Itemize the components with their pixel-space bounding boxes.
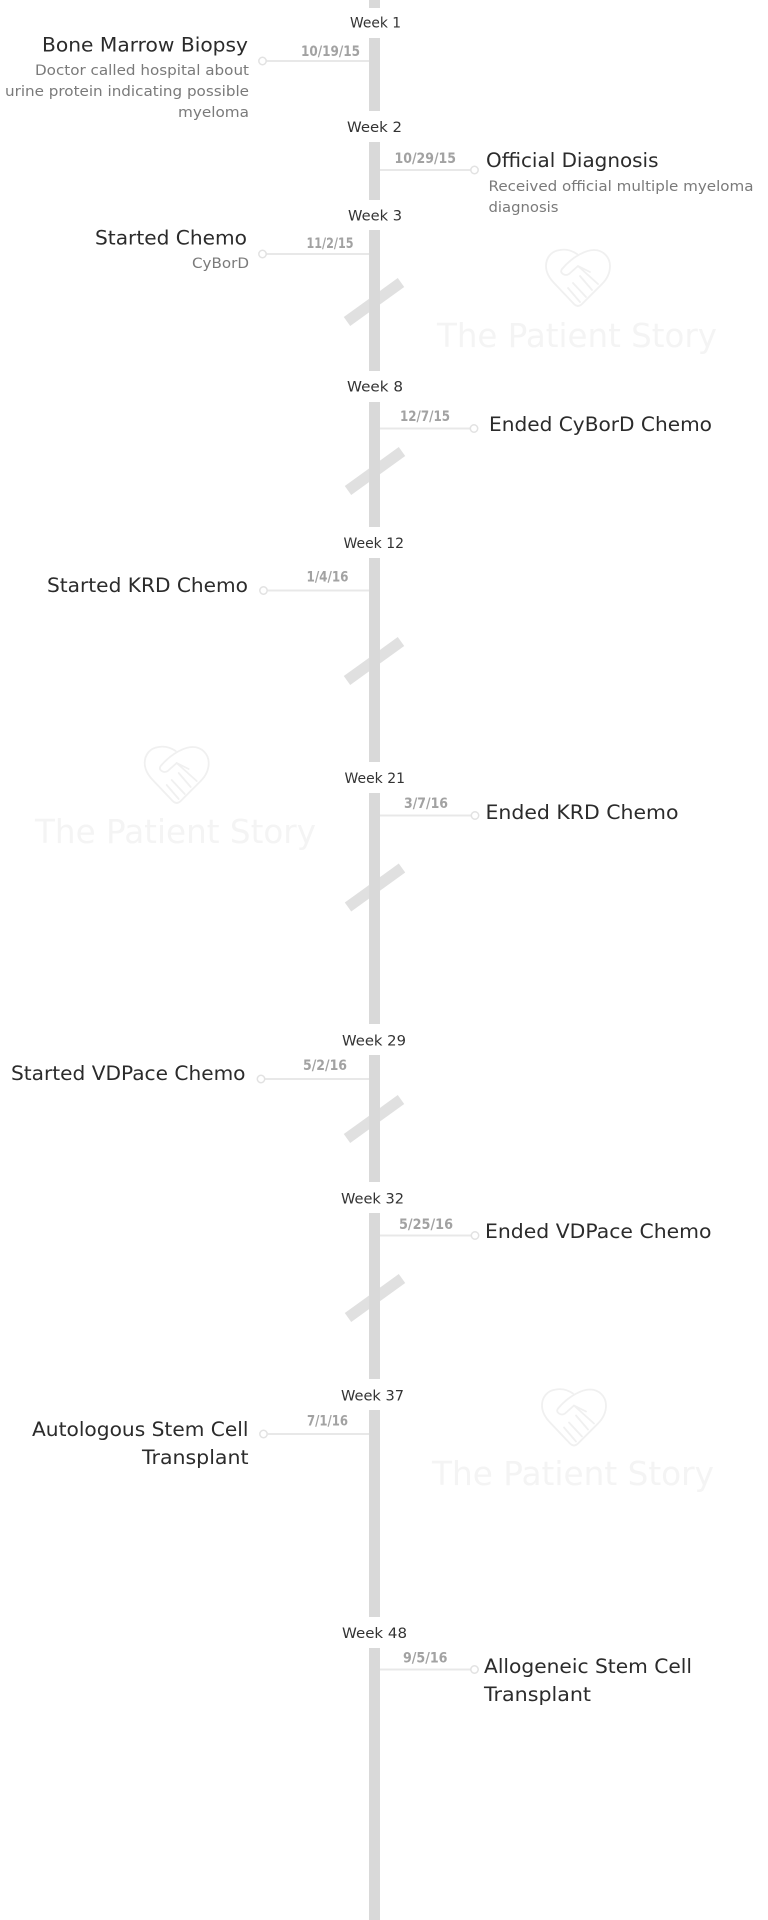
week labels: Week 3 [348, 208, 402, 224]
event: official diagnosis: 10/29/15 [394, 151, 456, 167]
event: official diagnosis [380, 149, 754, 216]
event: bone marrow biopsy: Doctor called hospital about [35, 63, 249, 79]
event: allogeneic stem cell transplant: Allogeneic Stem Cell [484, 1655, 692, 1678]
icon: heart handshake [145, 747, 209, 803]
week labels: Week 1 [350, 16, 401, 32]
timeline spine [369, 0, 380, 1920]
event: started krd chemo: Started KRD Chemo [47, 574, 248, 597]
event: ended vdpace chemo: 5/25/16 [399, 1217, 453, 1233]
week labels: Week 12 [344, 536, 404, 552]
event: started krd chemo [47, 570, 369, 597]
watermark: upper right [436, 250, 717, 355]
week labels: Week 29 [342, 1034, 406, 1050]
event: ended vdpace chemo: Ended VDPace Chemo [485, 1220, 712, 1243]
icon: heart handshake [542, 1389, 606, 1446]
event: allogeneic stem cell transplant [380, 1650, 692, 1706]
event: official diagnosis: Received official multiple myeloma [488, 179, 754, 195]
week labels: Week 32 [341, 1192, 404, 1208]
event: autologous stem cell transplant: Autologous Stem Cell [32, 1418, 248, 1441]
event: bone marrow biopsy [5, 34, 369, 121]
watermark text: The Patient Story [34, 812, 316, 851]
event: autologous stem cell transplant: 7/1/16 [307, 1414, 348, 1430]
event: allogeneic stem cell transplant: 9/5/16 [403, 1650, 448, 1666]
event: started vdpace chemo: Started VDPace Chemo [11, 1062, 246, 1085]
week labels: Week 8 [347, 380, 403, 396]
event: ended cybord chemo: Ended CyBorD Chemo [489, 413, 712, 436]
event: official diagnosis: diagnosis [488, 200, 558, 216]
timeline break slashes [347, 282, 402, 1318]
event: started vdpace chemo [11, 1058, 369, 1085]
event: ended krd chemo: 3/7/16 [404, 796, 448, 812]
watermark text: The Patient Story [436, 316, 717, 355]
event: bone marrow biopsy: Bone Marrow Biopsy [42, 34, 248, 56]
event: started krd chemo: 1/4/16 [306, 570, 348, 586]
event: started chemo: 11/2/15 [306, 236, 354, 252]
event: ended krd chemo [380, 796, 678, 824]
event: autologous stem cell transplant [32, 1414, 369, 1469]
event: autologous stem cell transplant: Transplant [141, 1446, 249, 1469]
event: ended vdpace chemo [380, 1217, 712, 1243]
event: started vdpace chemo: 5/2/16 [303, 1058, 347, 1074]
event: allogeneic stem cell transplant: Transplant [483, 1683, 591, 1706]
week labels: Week 37 [341, 1388, 404, 1404]
event: started chemo: Started Chemo [95, 226, 247, 250]
week labels: Week 2 [347, 120, 402, 136]
event: bone marrow biopsy: 10/19/15 [301, 44, 360, 60]
watermark text: The Patient Story [431, 1454, 714, 1493]
event: started chemo [95, 226, 369, 272]
watermark: lower right [431, 1389, 714, 1493]
event: bone marrow biopsy: urine protein indicating possible [5, 84, 249, 100]
week labels [341, 16, 407, 1642]
event: ended cybord chemo [380, 409, 712, 436]
event: official diagnosis: Official Diagnosis [486, 149, 658, 172]
event: ended krd chemo: Ended KRD Chemo [486, 801, 678, 824]
event: started chemo: CyBorD [192, 256, 249, 272]
event: bone marrow biopsy: myeloma [178, 105, 249, 121]
week labels: Week 21 [344, 771, 405, 787]
event: ended cybord chemo: 12/7/15 [400, 409, 450, 425]
watermark: middle left [34, 747, 316, 851]
icon: heart handshake [546, 250, 610, 306]
week labels: Week 48 [342, 1626, 407, 1642]
